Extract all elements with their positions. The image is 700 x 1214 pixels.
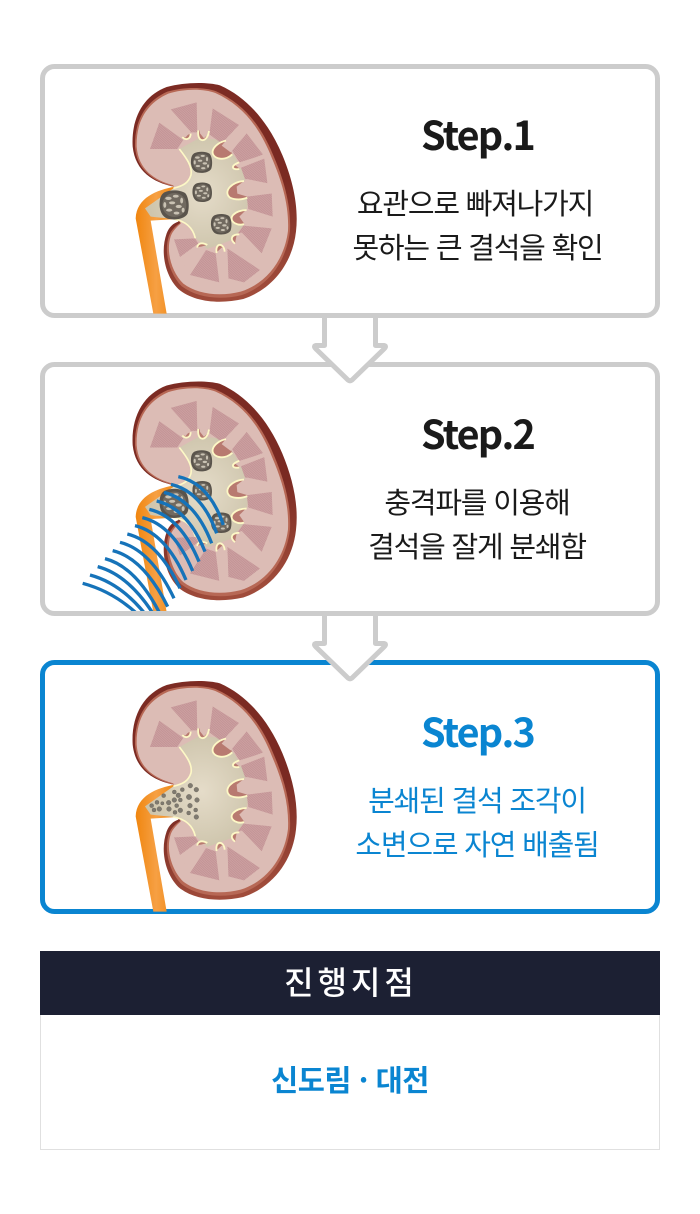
illustration: kidney with shock waves — [83, 381, 297, 615]
text: branch names: 신도림 · 대전 — [271, 1058, 429, 1100]
illustration: kidney with fragments — [133, 681, 297, 912]
text: step 3 description — [355, 778, 599, 864]
heading: Step.1: Step.1 — [421, 105, 534, 162]
arrow: step 1 to step 2 — [314, 318, 386, 381]
text: step 3 description: 분쇄된 결석 조각이 — [368, 778, 586, 820]
text: step 1 description: 요관으로 빠져나가지 — [357, 181, 593, 223]
text: step 1 description — [352, 181, 603, 267]
illustration: kidney with large stones — [133, 83, 297, 314]
heading: Step.3: Step.3 — [421, 702, 535, 759]
panel: step 2 — [42, 364, 658, 615]
panel: branches — [40, 951, 660, 1150]
heading: branches: 진행지점 — [284, 958, 418, 1004]
text: step 2 description — [368, 480, 586, 566]
text: step 2 description: 결석을 잘게 분쇄함 — [368, 524, 586, 566]
heading: Step.2: Step.2 — [421, 404, 535, 461]
text: step 2 description: 충격파를 이용해 — [384, 480, 570, 522]
text: step 3 description: 소변으로 자연 배출됨 — [355, 822, 599, 864]
text: step 1 description: 못하는 큰 결석을 확인 — [352, 225, 603, 267]
panel: step 3 — [42, 662, 658, 912]
arrow: step 2 to step 3 — [314, 616, 386, 679]
panel: step 1 — [42, 66, 658, 316]
header bar — [40, 951, 660, 1015]
icon: shock waves — [83, 477, 223, 615]
